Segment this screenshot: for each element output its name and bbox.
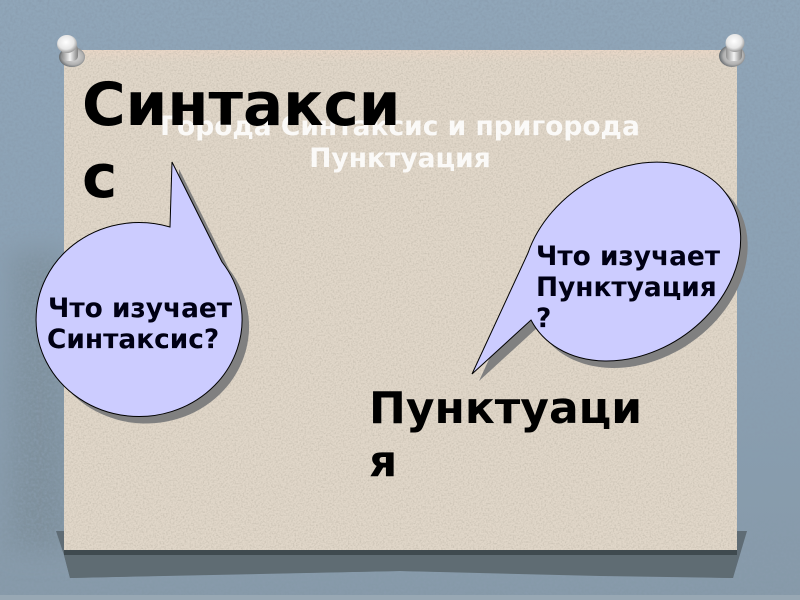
pin: top right <box>719 34 745 67</box>
paper panel <box>64 50 737 550</box>
heading: Punctuation: Пунктуаци <box>369 383 642 434</box>
callout text: Punctuation <box>536 241 721 334</box>
heading: Syntax <box>82 71 400 212</box>
callout: Syntax question <box>36 162 249 424</box>
paper shadow <box>56 531 747 578</box>
subtitle: white title text <box>160 111 640 174</box>
heading: Syntax: Синтакси <box>82 71 400 140</box>
heading: Punctuation <box>369 383 642 487</box>
callout text: Syntax: Что изучает <box>48 293 233 324</box>
callout: Punctuation question <box>472 162 748 381</box>
callout text: Punctuation: Что изучает <box>536 241 721 272</box>
callout text: Syntax: Синтаксис? <box>47 324 219 355</box>
subtitle: white title text: Пунктуация <box>309 143 491 174</box>
pin: top left <box>57 35 85 67</box>
callout text: Punctuation: Пунктуация <box>536 272 717 303</box>
heading: Syntax: с <box>82 143 117 212</box>
subtitle: white title text: Города Синтаксис и пригорода <box>160 111 640 142</box>
callout text: Syntax <box>47 293 233 355</box>
heading: Punctuation: я <box>369 436 397 487</box>
callout text: Punctuation: ? <box>536 303 551 334</box>
